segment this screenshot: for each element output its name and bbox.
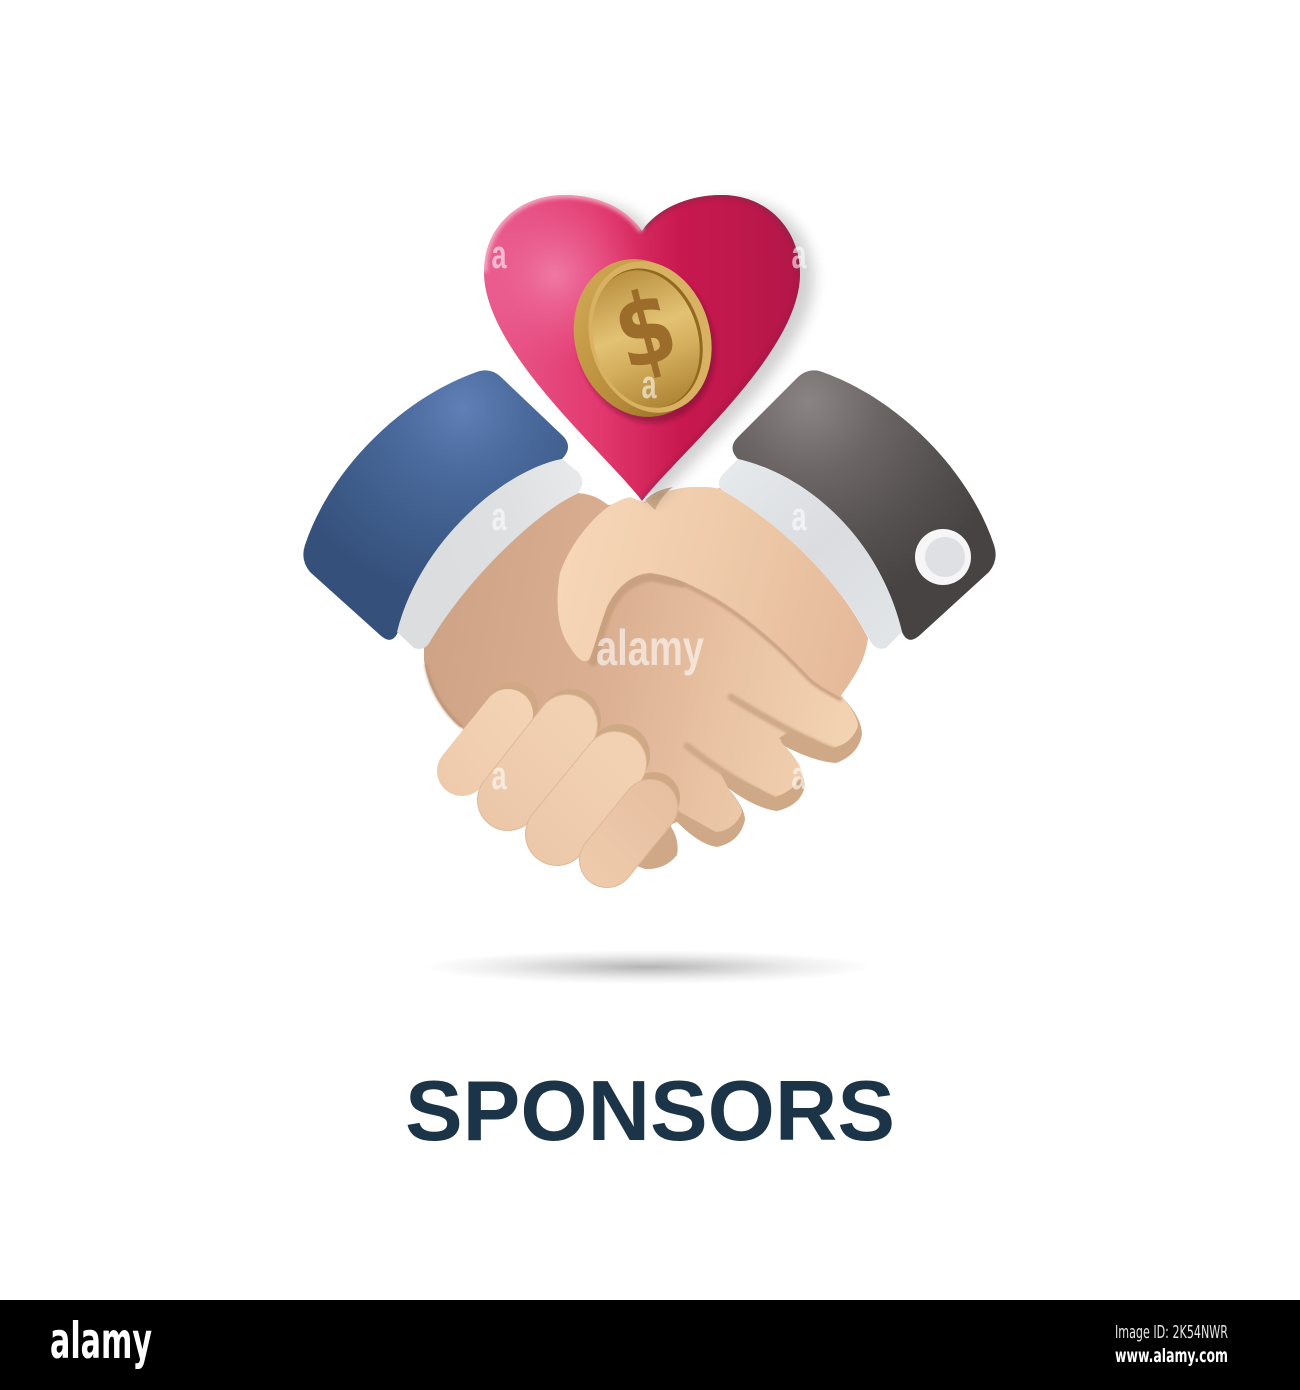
icon: heart shadow	[498, 200, 814, 505]
right hand finger rims	[600, 698, 862, 869]
watermark marks: a	[492, 233, 507, 277]
icon: heart	[484, 195, 800, 501]
icon: right shirt cuff	[719, 459, 902, 649]
watermark marks: a	[792, 495, 807, 539]
shadow under heart tip	[645, 487, 673, 510]
left fingers top rims	[490, 707, 654, 830]
watermark marks: a	[492, 754, 507, 798]
watermark marks: a	[792, 754, 807, 798]
palm	[424, 488, 855, 850]
right hand finger faces	[600, 698, 858, 832]
right finger crease two	[687, 746, 778, 802]
icon: right jacket sleeve	[732, 370, 996, 640]
title: SPONSORS	[405, 1064, 895, 1159]
icon: left jacket sleeve	[303, 370, 568, 640]
image id: Image ID: 2K54NWR	[1115, 1322, 1228, 1343]
icon: sponsorship handshake with heart and coin	[303, 180, 996, 869]
thumb web crease thin part	[682, 583, 840, 699]
ground shadow	[424, 950, 872, 984]
icon: clasped hands	[424, 487, 868, 869]
back of hand rim	[426, 664, 462, 727]
icon: sleeve button	[915, 529, 971, 585]
watermark marks	[492, 233, 807, 798]
thumb and upper right hand	[557, 487, 868, 697]
footer logo: alamy	[50, 1312, 152, 1370]
left hand fingers	[462, 714, 650, 860]
right finger crease one	[731, 697, 836, 752]
icon: dollar coin	[554, 242, 734, 440]
thumb web crease thick part	[593, 577, 682, 662]
watermark marks: a	[792, 233, 807, 277]
dollar sign: $	[602, 266, 688, 394]
watermark marks: a	[492, 495, 507, 539]
icon: left shirt cuff	[397, 459, 582, 649]
website: www.alamy.com	[1115, 1345, 1228, 1367]
footer bar	[0, 1300, 1300, 1390]
watermark marks: a	[642, 363, 657, 407]
watermark marks: alamy	[596, 620, 704, 676]
